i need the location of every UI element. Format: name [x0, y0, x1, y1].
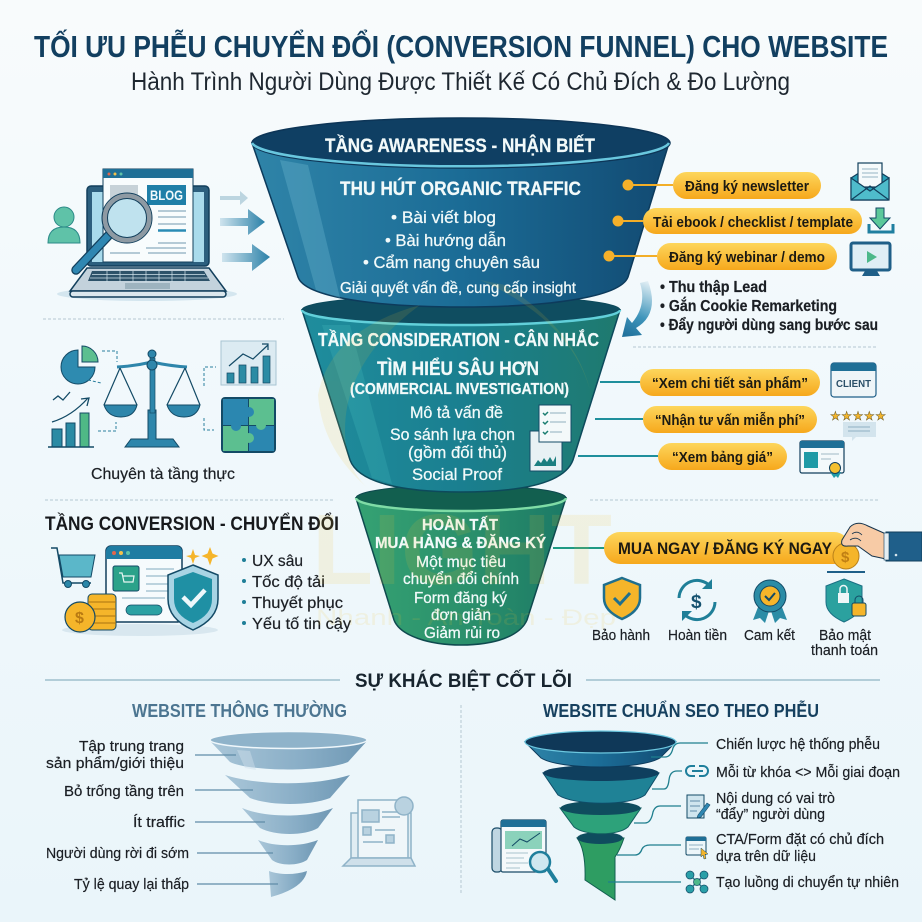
- funnel: conversion tier: [356, 485, 566, 645]
- badge: warranty: [592, 578, 650, 644]
- illustration: checkout, coins and shield: [51, 546, 218, 636]
- section heading: core difference: SỰ KHÁC BIỆT CỐT LÕI: [355, 670, 572, 692]
- grey funnel connectors and labels: Ít traffic: [133, 814, 186, 831]
- conversion funnel text: MUA HÀNG & ĐĂNG KÝ: [375, 533, 546, 552]
- icon: client window: CLIENT: [836, 378, 872, 390]
- conversion funnel text: Giảm rủi ro: [424, 625, 500, 642]
- awareness funnel text: TẦNG AWARENESS - NHẬN BIẾT: [325, 135, 595, 157]
- badge: commitment: [744, 580, 796, 644]
- pill: webinar: [657, 243, 837, 270]
- icon: form with cursor: [686, 837, 708, 859]
- consideration funnel text: TẦNG CONSIDERATION - CÂN NHẮC: [318, 329, 599, 350]
- consideration funnel text: Social Proof: [412, 466, 502, 484]
- seo funnel connectors and labels: “đẩy” người dùng: [716, 806, 825, 823]
- conversion funnel text: [375, 515, 546, 642]
- pill: newsletter: [673, 172, 821, 199]
- seo funnel connectors and labels: Nội dung có vai trò: [716, 790, 835, 807]
- icon: laptop with blog and magnifier: BLOG: [150, 188, 183, 203]
- grey funnel connectors and labels: Tập trung trang: [79, 738, 184, 755]
- list: awareness outcomes: [660, 279, 878, 334]
- pill: ebook: Tải ebook / checklist / template: [653, 215, 853, 231]
- badge: payment security: thanh toán: [811, 642, 878, 659]
- pill: pricing: “Xem bảng giá”: [672, 449, 773, 466]
- CTA group: consideration: [578, 369, 820, 470]
- icon: certificate window: [800, 441, 844, 478]
- icon: network nodes: [686, 871, 708, 893]
- pill: ebook: [643, 208, 862, 234]
- dividers: [43, 319, 880, 895]
- conversion funnel text: Một mục tiêu: [416, 554, 506, 571]
- seo funnel connectors and labels: [608, 736, 900, 891]
- list: conversion factors: UX sâu: [252, 553, 303, 570]
- consideration funnel text: [318, 329, 599, 484]
- trust icons: [592, 578, 878, 659]
- badge: commitment: Cam kết: [744, 627, 796, 644]
- pill: product detail: “Xem chi tiết sản phẩm”: [652, 375, 808, 392]
- arrows: traffic into funnel: [220, 191, 270, 271]
- list: awareness outcomes: • Thu thập Lead: [660, 279, 767, 296]
- caption: scale illustration: Chuyên tà tầng thực: [91, 466, 235, 483]
- badge: payment security: [811, 579, 878, 659]
- icon: faded laptop: [343, 797, 415, 866]
- list: awareness outcomes: • Đẩy người dùng sang bước sau: [660, 317, 878, 334]
- pill: free advice: [643, 406, 817, 433]
- pill: product detail: [640, 369, 820, 396]
- icon: monitor video: [851, 243, 890, 276]
- list: conversion factors: [242, 553, 351, 633]
- awareness funnel text: • Cẩm nang chuyên sâu: [363, 253, 540, 272]
- awareness funnel text: Giải quyết vấn đề, cung cấp insight: [340, 280, 577, 297]
- awareness funnel text: [325, 135, 595, 297]
- grey funnel connectors and labels: Tỷ lệ quay lại thấp: [74, 876, 189, 893]
- consideration funnel text: So sánh lựa chọn: [390, 426, 515, 444]
- badge: payment security: Bảo mật: [819, 627, 872, 644]
- awareness funnel text: • Bài hướng dẫn: [385, 231, 506, 250]
- icon: envelope: [851, 163, 889, 200]
- grey funnel connectors and labels: [46, 738, 278, 893]
- seo funnel connectors and labels: Tạo luồng di chuyển tự nhiên: [716, 874, 899, 891]
- grey funnel connectors and labels: Bỏ trống tầng trên: [64, 783, 184, 800]
- badge: refund: [668, 579, 727, 644]
- pill: pricing: [658, 443, 787, 470]
- badge: refund: $: [691, 592, 702, 613]
- seo funnel connectors and labels: CTA/Form đặt có chủ đích: [716, 831, 884, 848]
- watermark: LIGHT: [312, 494, 612, 606]
- grey funnel: [210, 732, 367, 897]
- consideration funnel text: (gồm đối thủ): [408, 444, 507, 462]
- seo funnel connectors and labels: dựa trên dữ liệu: [716, 848, 816, 865]
- illustration: checkout, coins and shield: $: [75, 610, 84, 627]
- colored seo funnel: [525, 731, 676, 900]
- grey funnel connectors and labels: sản phẩm/giới thiệu: [46, 755, 184, 772]
- grey funnel connectors and labels: Người dùng rời đi sớm: [46, 845, 189, 862]
- list: conversion factors: Tốc độ tải: [252, 574, 325, 591]
- icon: hand dropping coin: [827, 523, 922, 572]
- funnel layer 1: [525, 742, 676, 767]
- consideration funnel text: Mô tả vấn đề: [410, 404, 503, 422]
- icon: analytics document with magnifier: [492, 820, 556, 881]
- pill: newsletter: Đăng ký newsletter: [685, 179, 809, 195]
- seo funnel connectors and labels: Chiến lược hệ thống phễu: [716, 736, 880, 753]
- badge: refund: Hoàn tiền: [668, 627, 727, 644]
- icon: link: [686, 766, 708, 776]
- badge: warranty: Bảo hành: [592, 627, 650, 644]
- awareness funnel text: THU HÚT ORGANIC TRAFFIC: [340, 178, 581, 200]
- CTA: buy now: [553, 523, 922, 572]
- icon: star review: ★★★★★: [830, 409, 886, 423]
- arrow: to consideration: [622, 281, 652, 337]
- CTA group: awareness: [604, 172, 862, 270]
- watermark: [312, 280, 616, 630]
- pill: webinar: Đăng ký webinar / demo: [669, 250, 825, 266]
- icon: laptop with blog and magnifier: [57, 169, 237, 301]
- list: awareness outcomes: • Gắn Cookie Remarketing: [660, 297, 837, 315]
- illustration: comparison scale and charts: [48, 341, 276, 453]
- conversion funnel text: chuyển đổi chính: [403, 571, 519, 588]
- funnel: awareness tier: [252, 118, 670, 307]
- seo funnel connectors and labels: Mỗi từ khóa <> Mỗi giai đoạn: [716, 764, 900, 781]
- consideration funnel text: TÌM HIỂU SÂU HƠN: [377, 358, 539, 380]
- awareness funnel text: • Bài viết blog: [391, 208, 496, 227]
- list: conversion factors: Thuyết phục: [252, 595, 343, 612]
- subtitle: Hành Trình Người Dùng Được Thiết Kế Có Chủ Đích & Đo Lường: [131, 68, 790, 96]
- consideration funnel text: (COMMERCIAL INVESTIGATION): [350, 381, 569, 398]
- list: conversion factors: Yếu tố tin cậy: [252, 616, 351, 633]
- watermark: Nhanh - An Toàn - Đẹp: [316, 605, 616, 630]
- conversion funnel text: đơn giản: [431, 607, 491, 624]
- conversion funnel text: Form đăng ký: [414, 590, 507, 607]
- funnel layer 3: [560, 808, 641, 834]
- CTA: buy now: MUA NGAY / ĐĂNG KÝ NGAY: [618, 539, 833, 558]
- icon: documents: [530, 405, 571, 471]
- icon: client window: [831, 363, 876, 397]
- heading: conversion tier: TẦNG CONVERSION - CHUYỂN ĐỔI: [45, 513, 339, 535]
- icon: user: [48, 207, 80, 243]
- icon: download: [869, 208, 893, 232]
- pill: free advice: “Nhận tư vấn miễn phí”: [655, 412, 805, 429]
- funnel layer 4: [577, 838, 624, 900]
- heading: normal website: WEBSITE THÔNG THƯỜNG: [132, 700, 347, 721]
- icon: document pen: [687, 795, 710, 818]
- conversion funnel text: HOÀN TẤT: [422, 515, 498, 534]
- funnel layer 2: [543, 773, 659, 803]
- funnel: consideration tier: [302, 295, 620, 492]
- heading: seo website: WEBSITE CHUẨN SEO THEO PHỄU: [543, 700, 819, 721]
- icon: star review: [830, 409, 886, 441]
- icon: hand dropping coin: $: [841, 549, 850, 566]
